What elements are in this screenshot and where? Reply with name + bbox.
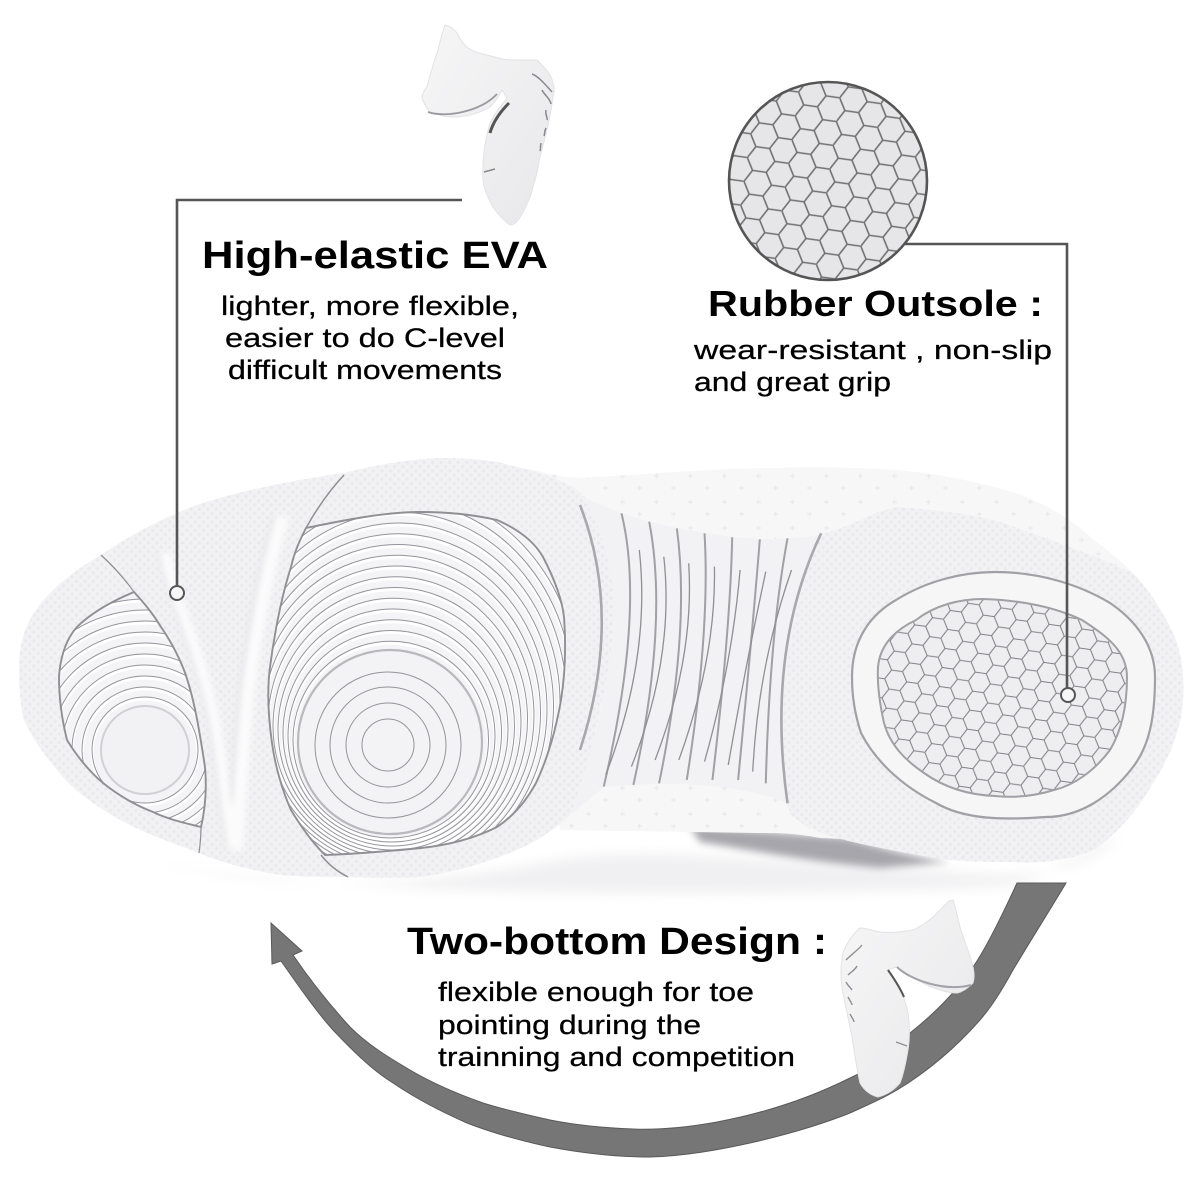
heel section	[781, 507, 1184, 862]
ball pad with concentric ridges	[267, 474, 566, 878]
text block: EVA description	[221, 291, 519, 385]
arch flex grooves	[580, 505, 821, 803]
text block: outsole description: wear-resistant , non-slip	[693, 335, 1052, 365]
text block: EVA description: lighter, more flexible,	[221, 291, 519, 321]
text block: outsole description: and great grip	[694, 367, 891, 397]
text block: two-bottom description: trainning and competition	[438, 1042, 795, 1072]
text block: outsole description	[693, 335, 1052, 397]
icon: top flexed shoe	[422, 25, 554, 225]
callout: outsole leader line	[904, 244, 1075, 702]
ground shadow under shoe	[150, 826, 1120, 893]
toe pad with concentric ridges	[58, 554, 207, 854]
text block: two-bottom description: flexible enough for toe	[438, 977, 754, 1007]
arrow: curved flex arrow	[271, 883, 1066, 1157]
icon: rubber outsole hexagon close-up	[729, 82, 927, 280]
heading: Two-bottom Design: Two-bottom Design :	[407, 921, 827, 963]
text block: two-bottom description: pointing during the	[438, 1010, 701, 1040]
shoe sole illustration	[2, 458, 1184, 900]
arch section	[570, 497, 849, 815]
text block: EVA description: easier to do C-level	[225, 323, 505, 353]
icon: bottom flexed shoe	[841, 900, 974, 1097]
knit mesh upper	[500, 464, 1133, 850]
text block: two-bottom description	[438, 977, 795, 1072]
front sole	[19, 458, 615, 878]
callout: EVA leader line	[170, 200, 462, 600]
raised flex ridges on forefoot	[160, 517, 283, 850]
text block: EVA description: difficult movements	[228, 355, 502, 385]
heel hexagon pad	[852, 572, 1155, 819]
heading: Rubber Outsole: Rubber Outsole :	[708, 283, 1043, 324]
heading: High-elastic EVA: High-elastic EVA	[202, 235, 548, 277]
